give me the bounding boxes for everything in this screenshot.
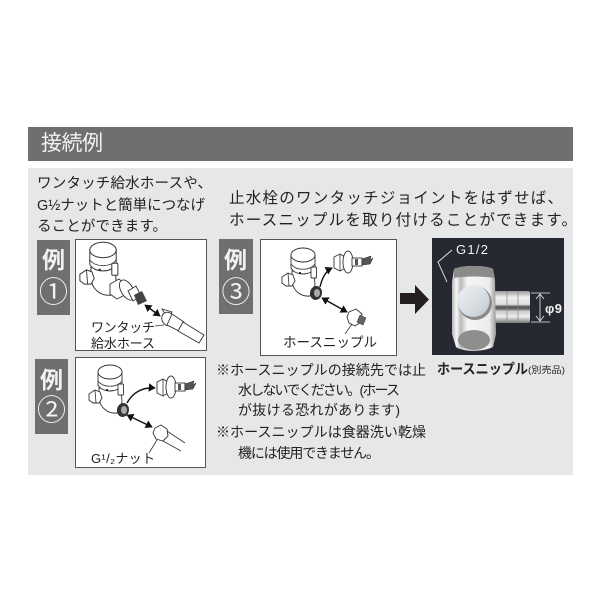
intro text: right: 止水栓のワンタッチジョイントをはずせば、 xyxy=(229,189,563,207)
heading: 接続例: 接続例 xyxy=(41,132,103,155)
label: 例2 xyxy=(35,359,68,434)
intro text: left: ワンタッチ給水ホースや、 xyxy=(37,175,212,192)
intro text: left xyxy=(37,175,212,235)
elbow body xyxy=(452,266,496,351)
notes: ※ホースニップルは食器洗い乾燥 xyxy=(216,424,426,440)
panel: example 2 xyxy=(76,358,206,468)
notes: 水しないでください。(ホース xyxy=(238,382,400,398)
notes: ※ホースニップルの接続先では止 xyxy=(216,362,426,378)
label: 例2: 例 xyxy=(40,367,63,393)
label: 例1: ① xyxy=(39,277,68,309)
label: 例1: 例 xyxy=(42,247,65,273)
notes: が抜ける恐れがあります) xyxy=(238,402,400,418)
nipple barb xyxy=(494,291,530,323)
notes: 機には使用できません。 xyxy=(238,445,380,461)
label: ワンタッチ給水ホース: ワンタッチ xyxy=(91,320,155,335)
G1/2 callout: G1/2 xyxy=(456,242,488,257)
diameter dimension: φ9 xyxy=(545,301,562,316)
panel: example 1 xyxy=(76,240,206,351)
caption: hose nipple: (別売品) xyxy=(528,364,565,375)
caption: hose nipple: ホースニップル xyxy=(437,361,528,377)
label: 例3: 例 xyxy=(224,247,247,273)
label: G1/2ナット: G¹/₂ナット xyxy=(91,451,155,466)
label: ワンタッチ給水ホース xyxy=(91,320,155,351)
arrow xyxy=(400,285,429,314)
intro text: right xyxy=(229,189,577,229)
intro text: left: ることができます。 xyxy=(37,218,167,235)
icon: faucet valve with hose nipple xyxy=(282,248,373,334)
icon: faucet valve with G1/2 nut xyxy=(89,365,196,453)
label: 例2: ② xyxy=(37,395,66,427)
label: 例1 xyxy=(37,240,70,315)
label: ホースニップル: ホースニップル xyxy=(283,335,377,350)
notes xyxy=(216,362,426,461)
background panel xyxy=(28,168,573,475)
intro text: left: G½ナットと簡単につなげ xyxy=(37,197,206,214)
label: ワンタッチ給水ホース: 給水ホース xyxy=(91,336,155,351)
header bar xyxy=(28,127,573,161)
icon: faucet valve with one-touch hose xyxy=(80,242,204,343)
photo: hose nipple xyxy=(432,238,564,355)
label: 例3 xyxy=(219,239,253,314)
panel: example 3 xyxy=(260,240,396,356)
intro text: right: ホースニップルを取り付けることができます。 xyxy=(229,211,577,229)
label: 例3: ③ xyxy=(221,277,251,309)
